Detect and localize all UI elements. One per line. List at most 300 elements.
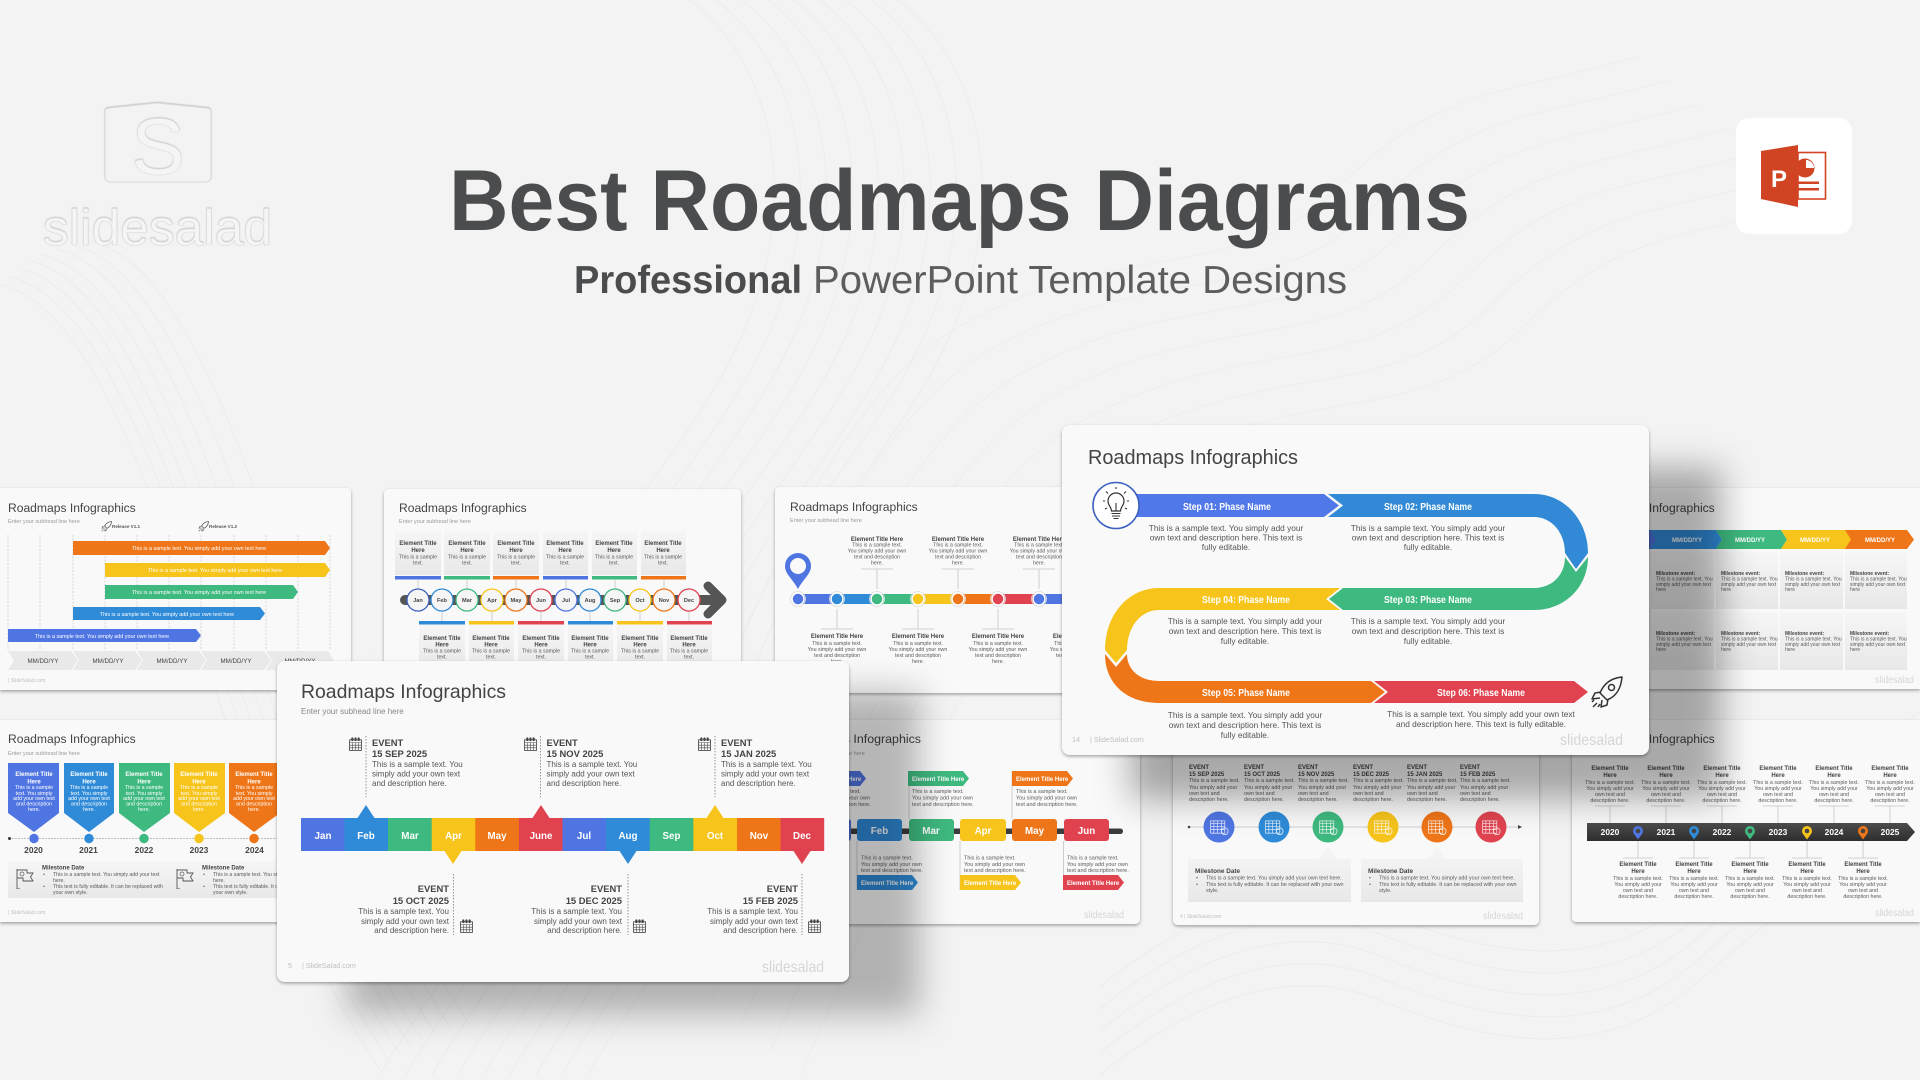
top element boxes: Element Title bbox=[644, 541, 682, 547]
element text: You simply add your own bbox=[1067, 862, 1128, 868]
bottom element labels: Here bbox=[1743, 869, 1757, 875]
milestone boxes: This is a sample text. You simply add your own text here. bbox=[1379, 876, 1515, 882]
month bar: Apr bbox=[445, 831, 462, 842]
top element labels: Element Title bbox=[1815, 766, 1853, 772]
event labels: EVENT bbox=[1353, 765, 1373, 771]
milestone cells: here bbox=[1785, 587, 1795, 593]
top event callouts: and description here. bbox=[546, 779, 621, 788]
top element boxes: Element Title bbox=[497, 541, 535, 547]
bottom event callouts: EVENT bbox=[767, 883, 798, 894]
icon: PowerPoint bbox=[1736, 118, 1852, 234]
month buttons: Feb bbox=[871, 826, 888, 837]
top element labels: You simply add your bbox=[1810, 786, 1858, 792]
event labels: This is a sample text. bbox=[1298, 778, 1349, 784]
date chevrons: MM/DD/YY bbox=[1735, 538, 1765, 544]
release markers bbox=[102, 521, 238, 531]
milestone boxes: style. bbox=[1379, 888, 1392, 894]
bottom element labels: You simply add your bbox=[1670, 882, 1718, 888]
bottom element labels: own text and bbox=[1679, 888, 1709, 894]
bottom element labels: This is a sample text. bbox=[1838, 876, 1888, 882]
milestone cells: simply add your own text bbox=[1850, 642, 1906, 648]
event labels: 15 SEP 2025 bbox=[1189, 772, 1225, 778]
element text: You simply add your own bbox=[912, 796, 973, 802]
element tags: Element Title Here bbox=[1067, 881, 1120, 887]
calendar timeline bbox=[1188, 812, 1522, 842]
milestone cells: simply add your own text bbox=[1721, 582, 1777, 588]
top element labels: You simply add your bbox=[1698, 786, 1746, 792]
milestone boxes: This is a sample text. You simply add your text bbox=[53, 872, 160, 878]
panel: featured S-curve phases bbox=[1062, 425, 1649, 755]
shield cards: Element Title bbox=[15, 772, 53, 778]
event labels: You simply add your bbox=[1298, 785, 1347, 791]
event labels: own text and bbox=[1244, 791, 1275, 797]
month bar: Jan bbox=[315, 831, 331, 842]
top event callouts: simply add your own text bbox=[372, 770, 461, 778]
month timeline with arrow: Aug bbox=[585, 598, 596, 604]
watermark: slidesalad bbox=[1875, 675, 1914, 686]
milestone cells: This is a sample text. You bbox=[1850, 576, 1907, 582]
panel: featured month bar timeline bbox=[277, 661, 849, 982]
footer: 4 | SlideSalad.com bbox=[1180, 914, 1222, 920]
milestone boxes: • bbox=[203, 872, 205, 878]
top element boxes: text. bbox=[560, 560, 570, 566]
top element boxes: Element Title bbox=[399, 541, 437, 547]
month bar: Nov bbox=[750, 831, 769, 842]
event labels: EVENT bbox=[1244, 765, 1264, 771]
subhead: Enter your subhead line here bbox=[399, 519, 471, 525]
shield cards: add your own text bbox=[68, 796, 110, 802]
date chevrons: MM/DD/YY bbox=[157, 658, 187, 665]
bottom element boxes: text. bbox=[585, 654, 595, 660]
event labels: description here. bbox=[1298, 797, 1338, 803]
milestone boxes: • bbox=[1369, 876, 1371, 882]
top element labels: Here bbox=[1603, 773, 1617, 779]
element text: You simply add your own bbox=[861, 862, 922, 868]
month buttons: Jun bbox=[1078, 826, 1095, 837]
milestone cells: simply add your own text bbox=[1850, 582, 1906, 588]
element labels: text and description bbox=[935, 554, 981, 560]
element text bbox=[809, 789, 1129, 874]
connector lines bbox=[821, 569, 1095, 629]
month buttons bbox=[800, 819, 1109, 841]
element labels: text and description bbox=[1056, 653, 1102, 659]
element labels: This is a sample text. bbox=[933, 542, 983, 548]
milestone boxes: • bbox=[1196, 882, 1198, 888]
element labels: You simply add your own bbox=[929, 548, 987, 554]
milestone cells: here bbox=[1785, 647, 1795, 653]
shield cards: and description bbox=[126, 802, 162, 808]
gantt bars bbox=[8, 541, 330, 642]
element text: This is a sample text. bbox=[861, 856, 913, 862]
heading: Roadmaps Infographics bbox=[8, 501, 136, 515]
milestone cells: simply add your own text bbox=[1656, 642, 1712, 648]
bottom element boxes: text. bbox=[536, 654, 546, 660]
dark year bar: 2022 bbox=[1713, 827, 1732, 837]
element labels: here. bbox=[1073, 659, 1085, 665]
event labels: EVENT bbox=[1460, 765, 1480, 771]
top element labels: You simply add your bbox=[1866, 786, 1914, 792]
milestone cells: Milestone event: bbox=[1850, 571, 1890, 577]
month timeline with arrow: Jul bbox=[562, 598, 570, 604]
milestone boxes: Milestone Date bbox=[1195, 868, 1241, 875]
element labels: here. bbox=[831, 659, 843, 665]
milestone cells: Milestone event: bbox=[1785, 631, 1825, 637]
bottom element labels: This is a sample text. bbox=[1669, 876, 1719, 882]
event labels bbox=[1189, 765, 1511, 803]
shield cards: and description bbox=[236, 802, 272, 808]
shield cards: here. bbox=[193, 807, 205, 813]
element labels: here. bbox=[992, 659, 1004, 665]
bottom element boxes: This is a sample bbox=[472, 648, 510, 654]
top element labels bbox=[1585, 766, 1915, 804]
phase descriptions: fully editable. bbox=[1221, 730, 1269, 740]
top event callouts: This is a sample text. You bbox=[372, 760, 463, 769]
bottom element boxes: text. bbox=[635, 654, 645, 660]
bottom element boxes: Here bbox=[484, 642, 498, 648]
phase names: Step 04: Phase Name bbox=[1202, 595, 1290, 606]
element labels: Element Title Here bbox=[892, 634, 945, 640]
element text: This is a sample text. bbox=[1067, 856, 1119, 862]
phase descriptions: fully editable. bbox=[1202, 542, 1250, 552]
phase descriptions: and description here. This text is fully editable. bbox=[1396, 719, 1566, 729]
logo mark outline bbox=[105, 103, 211, 182]
bottom element boxes bbox=[419, 621, 712, 670]
month timeline with arrow: Sep bbox=[610, 598, 621, 604]
bottom element boxes: Element Title bbox=[472, 636, 510, 642]
top element boxes: This is a sample bbox=[399, 554, 437, 560]
milestone cells bbox=[1651, 552, 1907, 670]
date chevrons bbox=[1630, 530, 1914, 549]
top event callouts: This is a sample text. You bbox=[546, 760, 637, 769]
milestone boxes: This is a sample text. You simply add your own text here. bbox=[1206, 876, 1342, 882]
top element labels: This is a sample text. bbox=[1585, 780, 1635, 786]
month buttons: Apr bbox=[975, 826, 992, 837]
bottom event callouts: 15 FEB 2025 bbox=[743, 895, 798, 906]
top event callouts: This is a sample text. You bbox=[721, 760, 812, 769]
bottom element labels: You simply add your bbox=[1726, 882, 1774, 888]
shield cards: text. You simply bbox=[71, 791, 108, 797]
milestone boxes: This text is fully editable. It can be replaced with bbox=[53, 884, 163, 890]
milestone cells: Milestone event: bbox=[1656, 571, 1696, 577]
milestone cells: here bbox=[1656, 647, 1666, 653]
footer link: | SlideSalad.com bbox=[1090, 735, 1144, 744]
heading: Roadmaps Infographics bbox=[399, 501, 527, 515]
element labels: here. bbox=[952, 560, 964, 566]
shield cards: This is a sample bbox=[70, 785, 108, 791]
bottom event callouts: 15 OCT 2025 bbox=[393, 895, 449, 906]
dark year bar: 2020 bbox=[1601, 827, 1620, 837]
connector lines bbox=[857, 771, 1064, 890]
event labels: This is a sample text. bbox=[1460, 778, 1511, 784]
bottom element labels: Here bbox=[1856, 869, 1870, 875]
bottom element labels: description here. bbox=[1787, 894, 1827, 900]
milestone cells: This is a sample text. You bbox=[1656, 636, 1713, 642]
shield cards: here. bbox=[138, 807, 150, 813]
bottom event callouts: simply add your own text bbox=[534, 917, 623, 926]
bottom element boxes: This is a sample bbox=[423, 648, 461, 654]
phase descriptions: This is a sample text. You simply add your bbox=[1168, 616, 1322, 626]
event labels: own text and bbox=[1189, 791, 1220, 797]
element labels: Element Title Here bbox=[811, 634, 864, 640]
milestone boxes: This text is fully editable. It can be replaced with your own bbox=[1379, 882, 1517, 888]
top element labels: Element Title bbox=[1647, 766, 1685, 772]
top element labels: own text and bbox=[1707, 792, 1737, 798]
month timeline with arrow: Oct bbox=[635, 598, 645, 604]
shield cards: and description bbox=[16, 802, 52, 808]
top event callouts: EVENT bbox=[546, 737, 578, 748]
bottom element labels: You simply add your bbox=[1783, 882, 1831, 888]
top element labels: This is a sample text. bbox=[1753, 780, 1803, 786]
shield cards: Element Title bbox=[235, 772, 273, 778]
bottom element boxes: text. bbox=[437, 654, 447, 660]
heading: Roadmaps Infographics bbox=[301, 681, 506, 703]
title: Best Roadmaps Diagrams bbox=[449, 153, 1470, 249]
milestone cells: simply add your own text bbox=[1785, 582, 1841, 588]
watermark: slidesalad bbox=[1084, 910, 1124, 921]
top element labels: own text and bbox=[1819, 792, 1849, 798]
date chevrons: MM/DD/YY bbox=[221, 658, 251, 665]
year pins bbox=[1633, 826, 1868, 840]
shield cards: Here bbox=[82, 780, 96, 786]
markers bbox=[358, 805, 810, 864]
top element labels: This is a sample text. bbox=[1809, 780, 1859, 786]
month timeline with arrow: Dec bbox=[684, 598, 694, 604]
milestone cells: Milestone event: bbox=[1721, 631, 1761, 637]
element labels: You simply add your own bbox=[1010, 548, 1068, 554]
milestone cells: This is a sample text. You bbox=[1850, 636, 1907, 642]
event labels: own text and bbox=[1353, 791, 1384, 797]
milestone boxes: This text is fully editable. It c bbox=[213, 884, 278, 890]
phase descriptions bbox=[1149, 523, 1576, 740]
top element labels: Element Title bbox=[1759, 766, 1797, 772]
milestone boxes: style. bbox=[1206, 888, 1219, 894]
bottom element labels: own text and bbox=[1735, 888, 1765, 894]
top element labels: Here bbox=[1883, 773, 1897, 779]
top element boxes: Element Title bbox=[448, 541, 486, 547]
icon: PowerPoint: P bbox=[1771, 166, 1787, 193]
bottom element labels: own text and bbox=[1792, 888, 1822, 894]
milestone cells: here bbox=[1656, 587, 1666, 593]
top element boxes: This is a sample bbox=[546, 554, 584, 560]
bottom element labels: Element Title bbox=[1619, 862, 1657, 868]
element text: text and description here. bbox=[964, 868, 1026, 874]
top element labels: own text and bbox=[1595, 792, 1625, 798]
top element labels: own text and bbox=[1875, 792, 1905, 798]
milestone cells: here bbox=[1850, 587, 1860, 593]
month bar bbox=[301, 818, 824, 851]
event labels: 15 FEB 2025 bbox=[1460, 772, 1496, 778]
date chevrons: MM/DD/YY bbox=[28, 658, 58, 665]
shield cards: and description bbox=[181, 802, 217, 808]
icon: calendar bbox=[350, 737, 361, 750]
bottom element boxes: Here bbox=[682, 642, 696, 648]
month timeline with arrow bbox=[400, 586, 722, 614]
phase descriptions: own text and description here. This text is bbox=[1352, 532, 1504, 542]
bottom event callouts: This is a sample text. You bbox=[707, 907, 798, 916]
phase names: Step 03: Phase Name bbox=[1384, 595, 1472, 606]
element text: You simply add your own bbox=[1016, 796, 1077, 802]
top element labels: own text and bbox=[1651, 792, 1681, 798]
milestone boxes: Milestone Date bbox=[42, 866, 85, 872]
bottom element labels: You simply add your bbox=[1614, 882, 1662, 888]
event labels: You simply add your bbox=[1189, 785, 1238, 791]
element text: This is a sample text. bbox=[809, 789, 861, 795]
month bar: Sep bbox=[663, 831, 680, 842]
shield cards: text. You simply bbox=[126, 791, 163, 797]
top element labels: Here bbox=[1659, 773, 1673, 779]
shield cards: text. You simply bbox=[181, 791, 218, 797]
subtitle: PowerPoint Template Designs bbox=[813, 259, 1347, 302]
top element labels: You simply add your bbox=[1754, 786, 1802, 792]
top event callouts: 15 SEP 2025 bbox=[372, 748, 427, 759]
panel: monthly circles roadmap bbox=[384, 489, 741, 693]
phase descriptions: This is a sample text. You simply add your bbox=[1149, 523, 1303, 533]
element text: text and description here. bbox=[1016, 802, 1078, 808]
bottom element labels: Here bbox=[1687, 869, 1701, 875]
month timeline with arrow: Feb bbox=[437, 598, 448, 604]
phase descriptions: This is a sample text. You simply add your bbox=[1168, 710, 1322, 720]
date chevrons: MM/DD/YY bbox=[1672, 538, 1702, 544]
gantt bars: This is a sample text. You simply add your own text here bbox=[100, 612, 234, 618]
month timeline with arrow: Jan bbox=[413, 598, 423, 604]
event labels: description here. bbox=[1244, 797, 1284, 803]
year axis: 2024 bbox=[245, 845, 264, 855]
bottom element labels: description here. bbox=[1730, 894, 1770, 900]
milestone boxes bbox=[8, 861, 278, 898]
heading: Roadmaps Infographics bbox=[1088, 447, 1298, 469]
milestone cells: This is a sample text. You bbox=[1656, 576, 1713, 582]
shield cards: here. bbox=[83, 807, 95, 813]
logo: slidesalad embossed bbox=[43, 102, 272, 256]
watermark: slidesalad bbox=[762, 959, 824, 976]
month bar: Mar bbox=[401, 831, 419, 842]
milestone boxes: your own style. bbox=[213, 890, 248, 896]
top element boxes: Here bbox=[509, 548, 523, 554]
footer: | SlideSalad.com bbox=[8, 910, 45, 916]
milestone boxes bbox=[1188, 847, 1523, 902]
event labels: EVENT bbox=[1407, 765, 1427, 771]
element labels: here. bbox=[912, 659, 924, 665]
panel: month buttons roadmap bbox=[785, 720, 1140, 924]
shield cards bbox=[8, 763, 280, 832]
element labels: Element Title Here bbox=[1013, 537, 1066, 543]
dark year bar: 2025 bbox=[1881, 827, 1900, 837]
event labels: EVENT bbox=[1189, 765, 1209, 771]
month bar: Aug bbox=[618, 831, 638, 842]
bottom element labels bbox=[1613, 862, 1888, 900]
top element labels: Here bbox=[1771, 773, 1785, 779]
dark year bar: 2024 bbox=[1825, 827, 1844, 837]
gantt grid bbox=[8, 535, 330, 650]
watermark: slidesalad bbox=[1483, 911, 1523, 922]
top event callouts: EVENT bbox=[721, 737, 753, 748]
heading: Roadmaps Infographics bbox=[8, 732, 136, 746]
top event callouts: 15 JAN 2025 bbox=[721, 748, 776, 759]
top element boxes: text. bbox=[658, 560, 668, 566]
top element labels: description here. bbox=[1590, 798, 1630, 804]
phase names: Step 01: Phase Name bbox=[1183, 502, 1271, 513]
phase names bbox=[1183, 502, 1525, 699]
milestone cells: here bbox=[1850, 647, 1860, 653]
subhead: Enter your subhead line here bbox=[301, 707, 404, 716]
watermark: slidesalad bbox=[1560, 732, 1623, 749]
bottom element labels: You simply add your bbox=[1839, 882, 1887, 888]
bottom element boxes: text. bbox=[684, 654, 694, 660]
month track bbox=[805, 828, 1123, 834]
date chevrons: MM/DD/YY bbox=[1865, 538, 1895, 544]
element labels: text and description bbox=[814, 653, 860, 659]
bottom element labels: Element Title bbox=[1788, 862, 1826, 868]
top element labels: Element Title bbox=[1703, 766, 1741, 772]
element text: text and description here. bbox=[1067, 868, 1129, 874]
gantt bars: This is a sample text. You simply add your own text here bbox=[148, 568, 282, 574]
subhead: Enter your subhead line here bbox=[790, 518, 862, 524]
month timeline with arrow: May bbox=[511, 598, 522, 604]
gantt bars: This is a sample text. You simply add your own text here bbox=[132, 590, 266, 596]
top element boxes: This is a sample bbox=[644, 554, 682, 560]
top element labels: This is a sample text. bbox=[1697, 780, 1747, 786]
date chevrons: MM/DD/YY bbox=[285, 658, 315, 665]
panel: dark year bar roadmap bbox=[1572, 720, 1920, 922]
element labels: This is a sample text. bbox=[1054, 641, 1104, 647]
milestone cells: here bbox=[1721, 587, 1731, 593]
bottom element labels: Element Title bbox=[1731, 862, 1769, 868]
shield cards: Here bbox=[27, 780, 41, 786]
shield cards: Element Title bbox=[70, 772, 108, 778]
panel: milestone table roadmap bbox=[1572, 488, 1920, 689]
panel: gantt roadmap bbox=[0, 488, 351, 690]
shield cards: add your own text bbox=[233, 796, 275, 802]
element tags: Element Title Here bbox=[809, 777, 862, 783]
year axis bbox=[8, 834, 280, 855]
month timeline with arrow: Mar bbox=[462, 598, 473, 604]
top element labels: description here. bbox=[1646, 798, 1686, 804]
bottom event callouts bbox=[358, 874, 820, 935]
phase descriptions: fully editable. bbox=[1221, 636, 1269, 646]
phase descriptions: own text and description here. This text is bbox=[1169, 626, 1321, 636]
subtitle: Professional bbox=[574, 259, 802, 302]
top element labels: Here bbox=[1715, 773, 1729, 779]
element labels: text and description bbox=[895, 653, 941, 659]
element labels: Element Title Here bbox=[1053, 634, 1106, 640]
event labels: You simply add your bbox=[1353, 785, 1402, 791]
S-curve road bbox=[1105, 494, 1588, 703]
event labels: description here. bbox=[1189, 797, 1229, 803]
top element boxes: text. bbox=[511, 560, 521, 566]
event labels: This is a sample text. bbox=[1353, 778, 1404, 784]
element tags: Element Title Here bbox=[1016, 777, 1069, 783]
bottom event callouts: EVENT bbox=[418, 883, 449, 894]
dark year bar: 2023 bbox=[1769, 827, 1788, 837]
event labels: own text and bbox=[1298, 791, 1329, 797]
icon: rocket bbox=[1592, 677, 1622, 707]
shield cards: add your own text bbox=[178, 796, 220, 802]
watermark: slidesalad bbox=[1875, 908, 1914, 919]
phase descriptions: own text and description here. This text is bbox=[1352, 626, 1504, 636]
event labels: description here. bbox=[1407, 797, 1447, 803]
subhead: Enter your subhead line here bbox=[8, 751, 80, 757]
year axis: 2023 bbox=[190, 845, 209, 855]
year axis: 2020 bbox=[24, 845, 43, 855]
element labels: This is a sample text. bbox=[893, 641, 943, 647]
milestone cells: Milestone event: bbox=[1656, 631, 1696, 637]
element tags: Element Title Here bbox=[964, 881, 1017, 887]
element text: This is a sample text. bbox=[964, 856, 1016, 862]
top element labels: You simply add your bbox=[1642, 786, 1690, 792]
milestone boxes: • bbox=[43, 884, 45, 890]
element labels: text and description bbox=[975, 653, 1021, 659]
event labels: 15 DEC 2025 bbox=[1353, 772, 1390, 778]
